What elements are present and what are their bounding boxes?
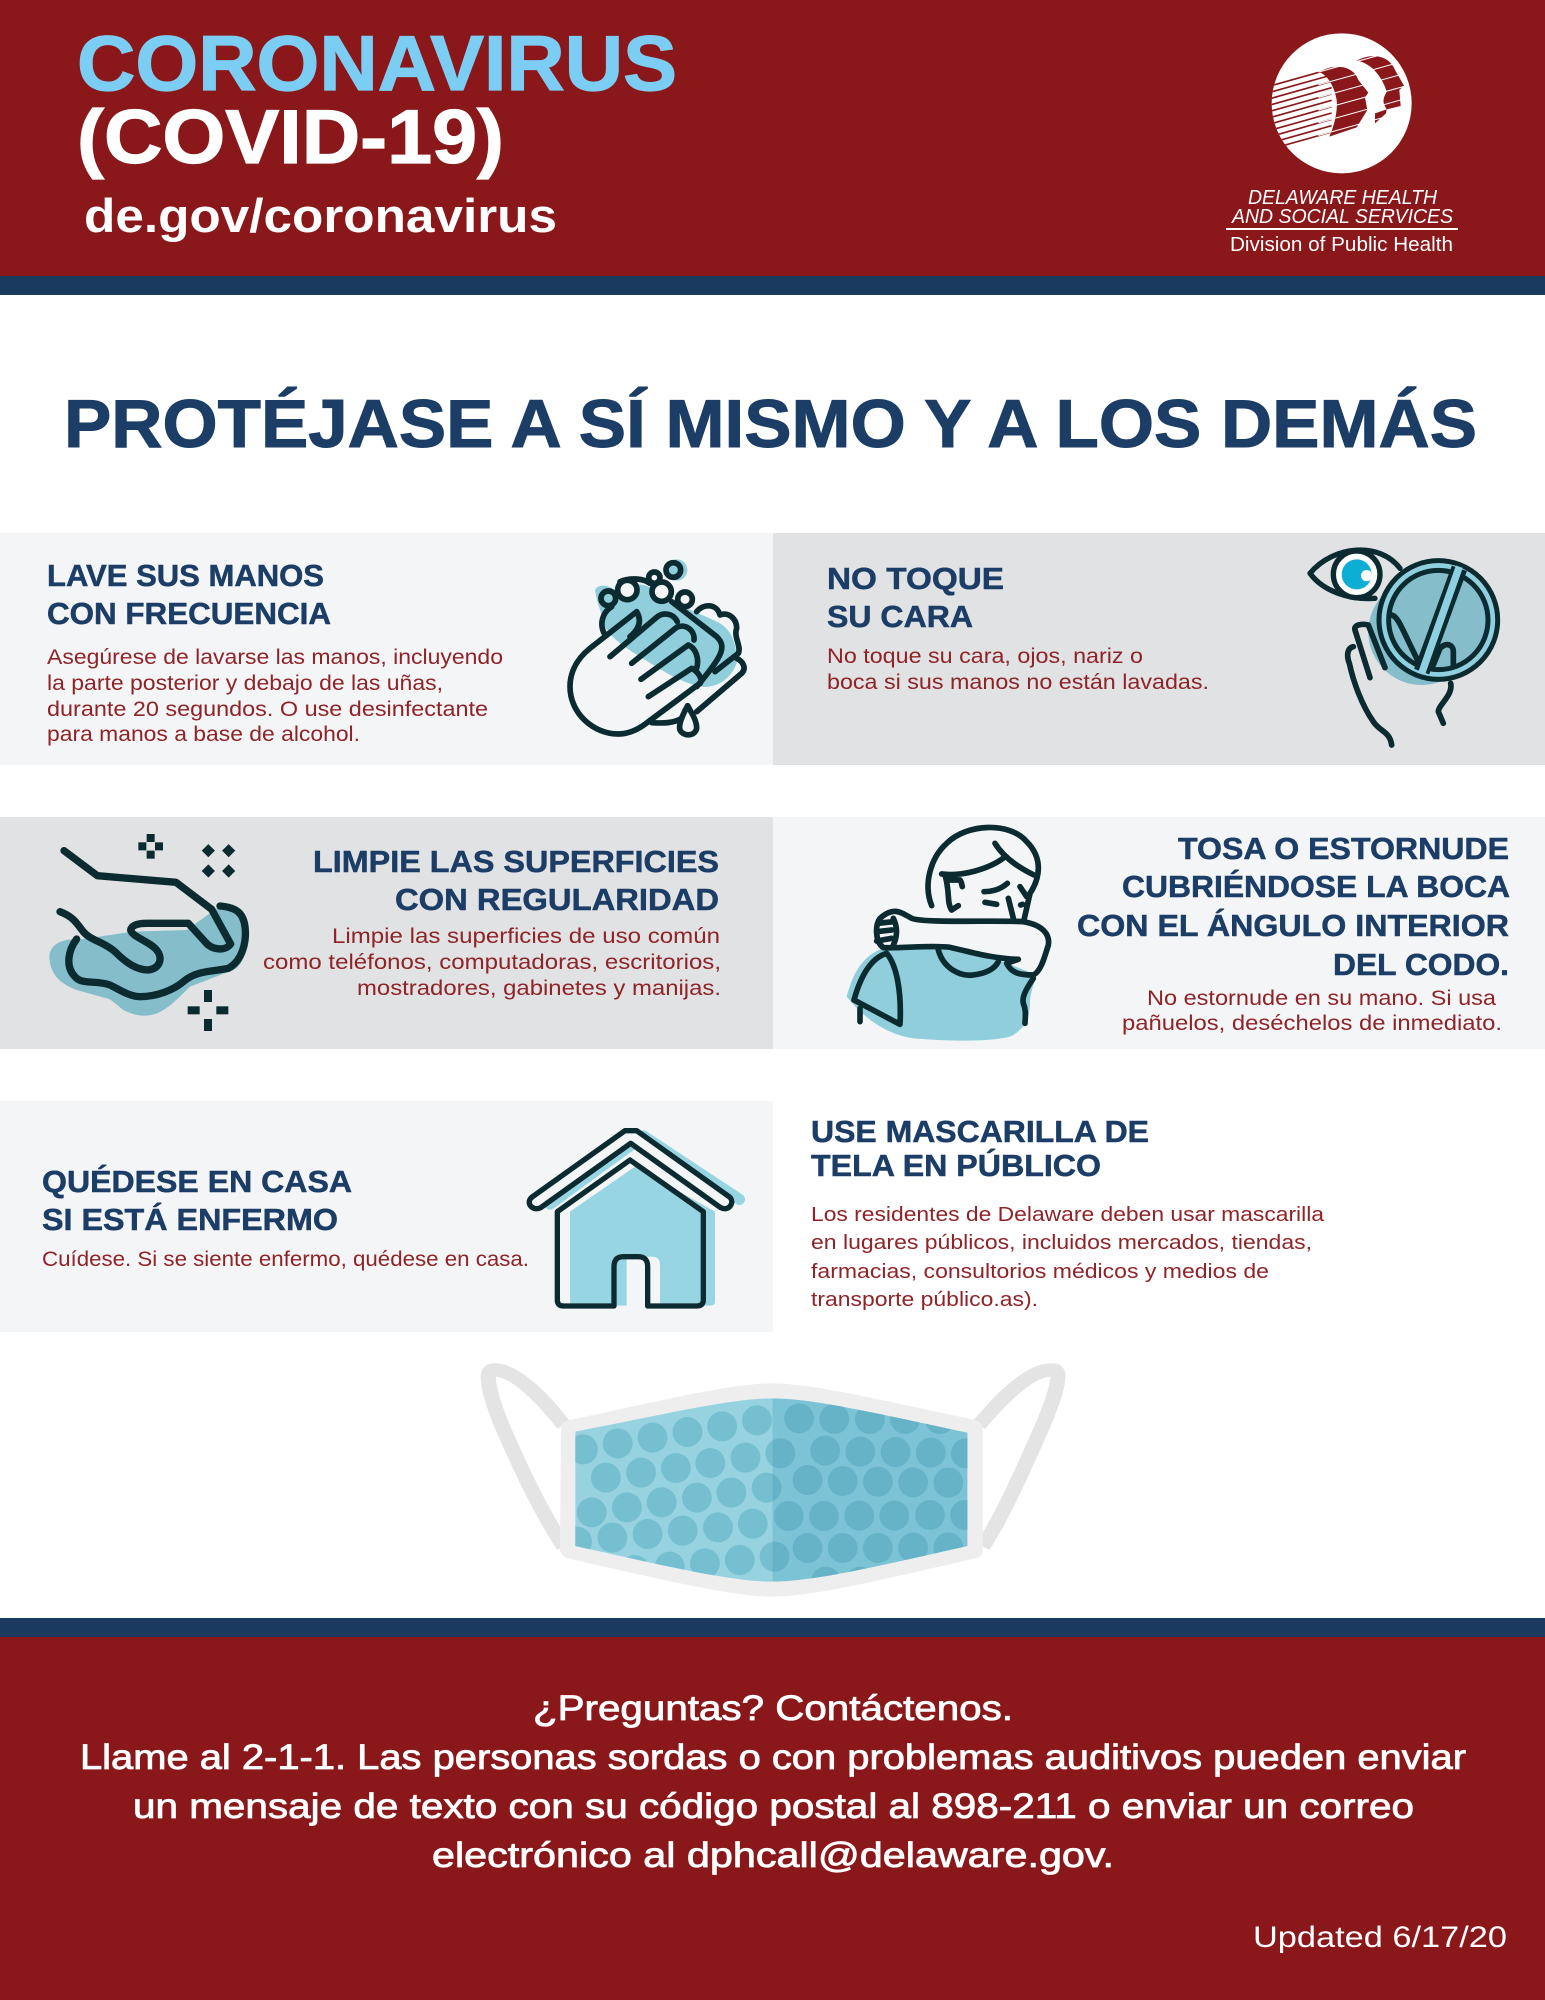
logo: delaware health and social services [1226, 33, 1458, 256]
text: clean surfaces instructions [263, 925, 721, 1000]
heading: stay home: SI ESTÁ ENFERMO [42, 1202, 338, 1237]
text: wash hands instructions: para manos a base de alcohol. [47, 723, 360, 746]
heading: wear a mask [811, 1114, 1149, 1183]
heading: do not touch face [827, 561, 1004, 634]
heading: stay home [42, 1164, 352, 1237]
text: stay home instructions: Cuídese. Si se siente enfermo, quédese en casa. [42, 1248, 529, 1271]
icon: washing hands [570, 559, 744, 735]
heading: cough or sneeze: CON EL ÁNGULO INTERIOR [1077, 908, 1509, 943]
logo text: delaware health: DELAWARE HEALTH [1248, 187, 1438, 209]
icon: eye, hand and prohibition sign [1310, 550, 1498, 745]
footer text: contact information: electrónico al dphcall@delaware.gov. [432, 1836, 1114, 1875]
heading: clean surfaces [313, 844, 719, 917]
text: wear a mask instructions: Los residentes de Delaware deben usar mascarilla [811, 1204, 1325, 1226]
heading: stay home: QUÉDESE EN CASA [42, 1164, 352, 1199]
logo text: division of public health: Division of Public Health [1230, 234, 1453, 256]
text: cough or sneeze instructions: pañuelos, deséchelos de inmediato. [1122, 1012, 1502, 1035]
header banner [0, 0, 1545, 295]
heading: do not touch face: NO TOQUE [827, 561, 1004, 596]
text: wash hands instructions: durante 20 segundos. O use desinfectante [47, 698, 488, 721]
heading: wash hands: LAVE SUS MANOS [47, 558, 324, 593]
text: wear a mask instructions: transporte público.as). [811, 1289, 1038, 1311]
heading: cough or sneeze: TOSA O ESTORNUDE [1178, 831, 1509, 866]
heading: wear a mask: TELA EN PÚBLICO [811, 1147, 1101, 1183]
heading: clean surfaces: LIMPIE LAS SUPERFICIES [313, 844, 719, 879]
heading: do not touch face: SU CARA [827, 599, 973, 634]
text: wash hands instructions: la parte posterior y debajo de las uñas, [47, 672, 443, 695]
panel: clean surfaces [0, 817, 773, 1049]
panel: stay home [0, 1101, 773, 1332]
heading: clean surfaces: CON REGULARIDAD [395, 882, 719, 917]
main heading: PROTÉJASE A SÍ MISMO Y A LOS DEMÁS [64, 386, 1477, 462]
heading: wash hands [47, 558, 331, 631]
panel: wash hands [0, 533, 773, 765]
header title: covid-19: (COVID-19) [77, 95, 504, 180]
panel: do not touch face [773, 533, 1545, 765]
heading: wear a mask: USE MASCARILLA DE [811, 1114, 1149, 1149]
logo emblem: striped heads [1270, 33, 1412, 173]
header title: coronavirus: CORONAVIRUS [77, 19, 677, 107]
text: wash hands instructions: Asegúrese de lavarse las manos, incluyendo [47, 646, 503, 669]
text: wear a mask instructions: en lugares públicos, incluidos mercados, tiendas, [811, 1232, 1312, 1254]
text: clean surfaces instructions: como teléfonos, computadoras, escritorios, [263, 951, 721, 974]
text: wash hands instructions [47, 646, 503, 746]
icon: hand wiping surface [49, 834, 247, 1031]
heading: wash hands: CON FRECUENCIA [47, 596, 331, 631]
footer text: contact information: un mensaje de texto con su código postal al 898-211 o enviar un correo [133, 1787, 1414, 1826]
heading: cough or sneeze [1077, 831, 1510, 982]
website address: de.gov/coronavirus [84, 189, 557, 242]
text: do not touch face instructions: boca si sus manos no están lavadas. [827, 671, 1209, 694]
update date: Updated 6/17/20 [1253, 1921, 1507, 1954]
text: wear a mask instructions: farmacias, consultorios médicos y medios de [811, 1261, 1269, 1283]
text: clean surfaces instructions: mostradores, gabinetes y manijas. [357, 977, 721, 1000]
text: do not touch face instructions [827, 645, 1209, 694]
text: cough or sneeze instructions [1122, 987, 1502, 1035]
heading: cough or sneeze: DEL CODO. [1333, 947, 1509, 982]
footer text: contact information [80, 1689, 1466, 1875]
footer banner [0, 1618, 1545, 2000]
panel: cough or sneeze [773, 817, 1545, 1049]
footer text: contact information: Llame al 2-1-1. Las personas sordas o con problemas auditivos pueden enviar [80, 1738, 1466, 1777]
text: cough or sneeze instructions: No estornude en su mano. Si usa [1147, 987, 1496, 1010]
heading: cough or sneeze: CUBRIÉNDOSE LA BOCA [1122, 869, 1510, 904]
logo text: and social services: AND SOCIAL SERVICES [1231, 206, 1454, 228]
text: do not touch face instructions: No toque su cara, ojos, nariz o [827, 645, 1143, 668]
text: clean surfaces instructions: Limpie las superficies de uso común [332, 925, 720, 948]
panel: wear a mask [811, 1114, 1325, 1311]
icon: person coughing into elbow [847, 827, 1049, 1041]
text: wear a mask instructions [811, 1204, 1325, 1311]
footer text: contact information: ¿Preguntas? Contáctenos. [533, 1689, 1013, 1728]
illustration: cloth face mask [488, 1370, 1058, 1597]
icon: house [529, 1131, 739, 1306]
